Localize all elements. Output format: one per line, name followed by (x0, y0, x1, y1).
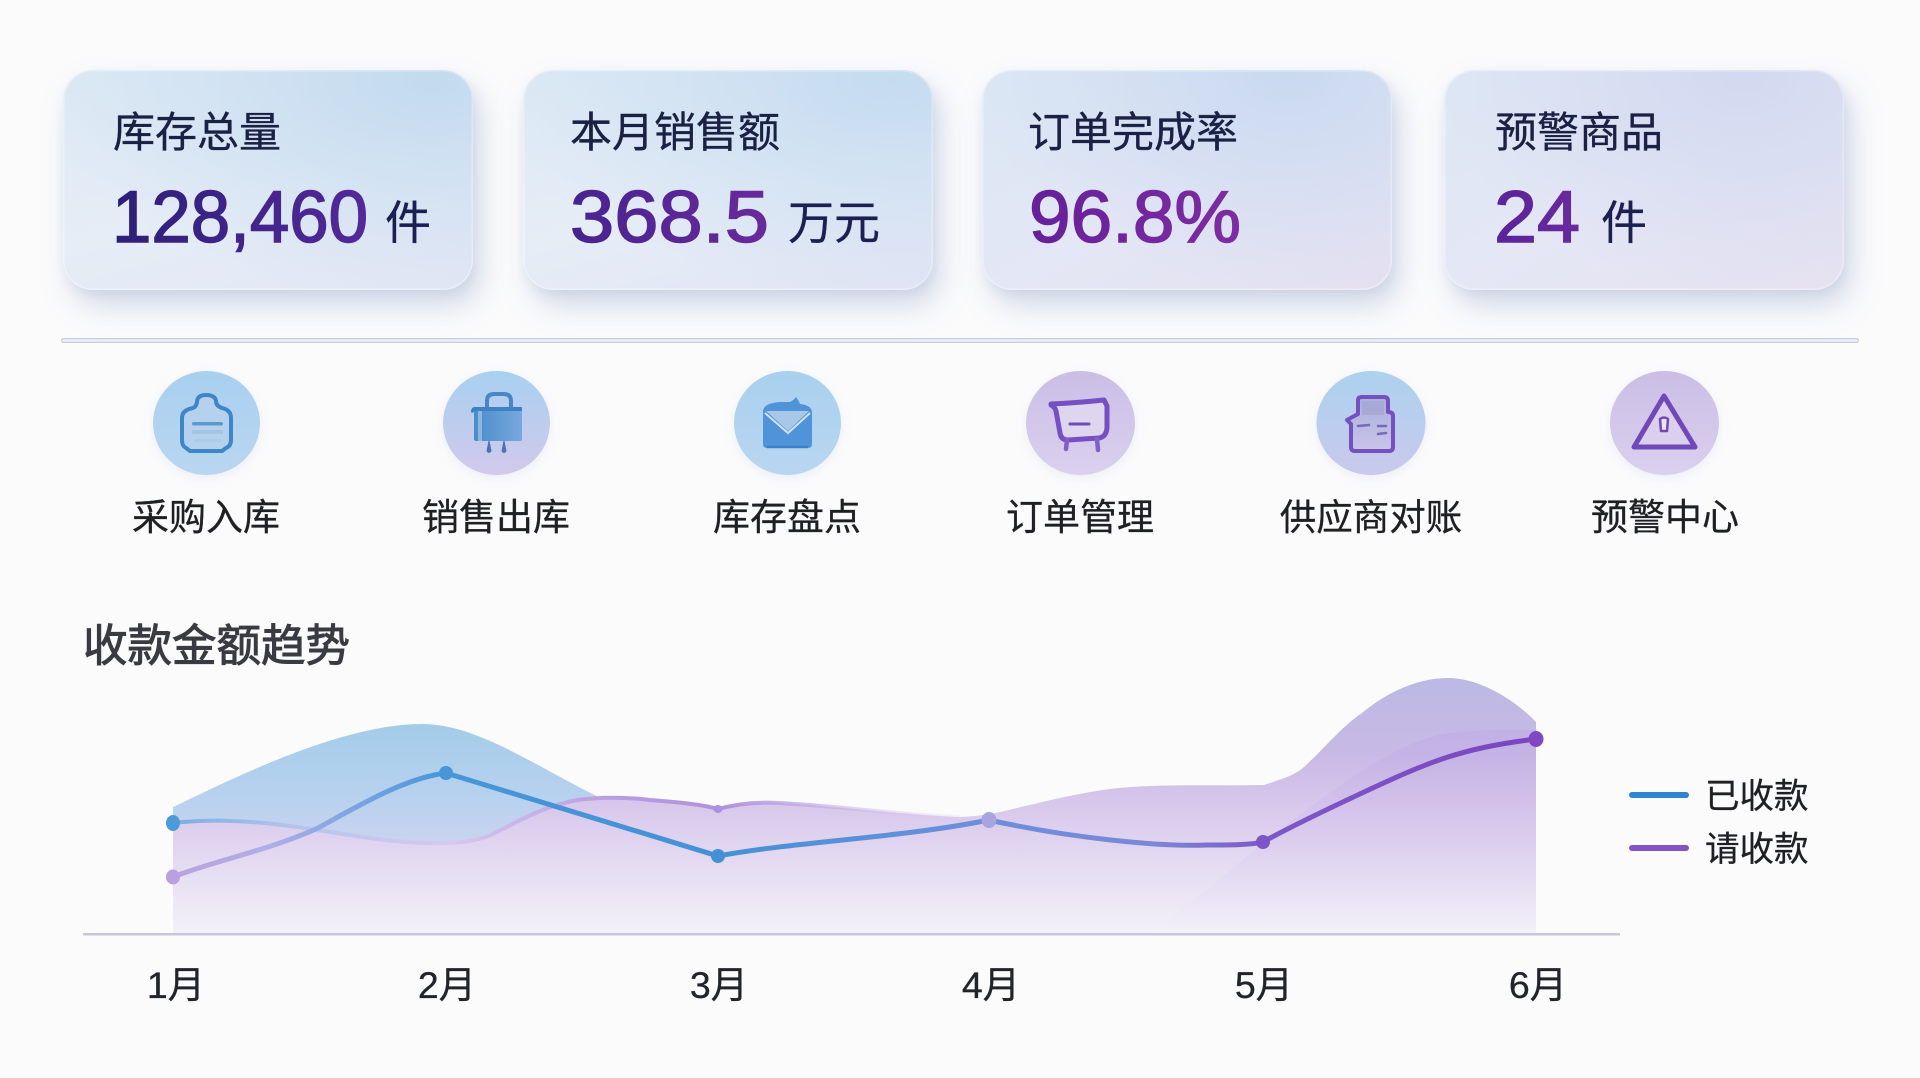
label: 订单管理 (1006, 497, 1154, 538)
nav item: supplier reconciliation (1280, 371, 1462, 538)
panel: KPI card monthly sales (523, 70, 933, 290)
area: pending (purple) (173, 678, 1536, 934)
label: May: 5月 (1235, 964, 1293, 1006)
label: monthly sales: 本月销售额 (570, 109, 780, 156)
legend text: pending: 请收款 (1705, 831, 1808, 869)
value: 24: 24 (1494, 177, 1580, 258)
label: January: 1月 (147, 964, 205, 1006)
panel: KPI card alert goods (1444, 70, 1844, 290)
icon: cart (1026, 371, 1135, 477)
nav item: sales outbound (422, 371, 570, 538)
icon: envelope (734, 371, 841, 477)
value: 128,460: 128,460 (112, 177, 368, 258)
panel: KPI card inventory total (63, 70, 473, 290)
unit: 万元 (788, 197, 880, 249)
legend: pending (1629, 845, 1689, 851)
area: received (blue) (173, 724, 710, 880)
area: inner purple layer (1150, 729, 1536, 934)
label: April: 4月 (962, 964, 1020, 1006)
heading: collection trend: 收款金额趋势 (83, 622, 350, 671)
label: 供应商对账 (1280, 497, 1462, 538)
label: inventory total: 库存总量 (113, 109, 281, 156)
label: 预警中心 (1591, 497, 1739, 538)
label: February: 2月 (418, 964, 476, 1006)
value: 96.8%: 96.8% (1029, 177, 1241, 258)
label: order completion: 订单完成率 (1028, 109, 1238, 156)
label: June: 6月 (1509, 964, 1567, 1006)
nav item: alert center (1591, 371, 1739, 538)
icon: purchase clipboard bag (153, 371, 260, 477)
legend: received (1629, 792, 1689, 798)
icon: document (1316, 371, 1426, 477)
x axis (83, 933, 1620, 936)
panel: KPI card order completion (982, 70, 1392, 290)
line: main series (173, 739, 1536, 877)
unit: 件 (1601, 197, 1647, 249)
label: 采购入库 (132, 497, 280, 538)
value: 368.5: 368.5 (570, 177, 769, 258)
legend text: received: 已收款 (1705, 778, 1808, 816)
unit: 件 (385, 197, 431, 249)
label: 库存盘点 (713, 497, 861, 538)
data points (166, 731, 1544, 884)
icon: warning triangle (1610, 371, 1719, 477)
icon: sales bag (443, 371, 550, 477)
nav item: purchase inbound (132, 371, 280, 538)
nav item: order management (1006, 371, 1154, 538)
nav item: stocktaking (713, 371, 861, 538)
label: March: 3月 (690, 964, 748, 1006)
label: 销售出库 (422, 497, 570, 538)
line: upper purple series (173, 798, 960, 843)
label: alert goods: 预警商品 (1495, 109, 1663, 156)
